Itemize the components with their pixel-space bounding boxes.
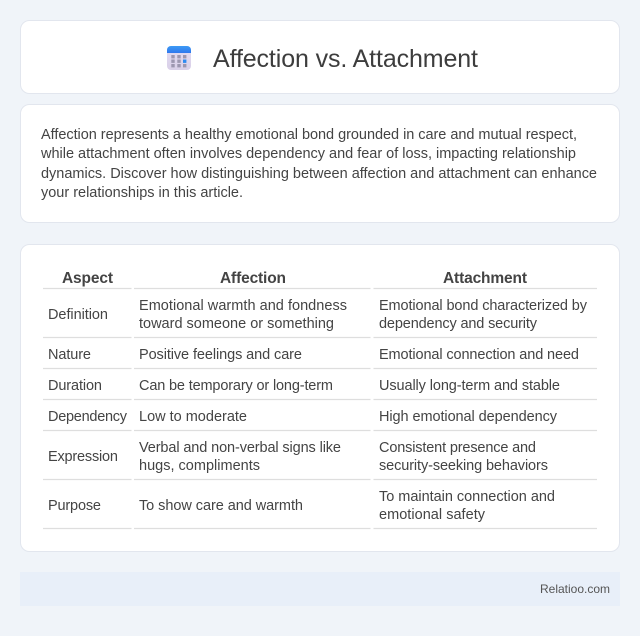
row: Definition: toward someone or something (139, 316, 334, 332)
table rules (43, 288, 597, 528)
icon: calendar (167, 46, 191, 70)
row: Purpose (48, 489, 555, 523)
intro text: dynamics. Discover how distinguishing between affection and attachment can enhance (41, 166, 597, 182)
row: Expression: hugs, compliments (139, 458, 260, 474)
row: Definition: dependency and security (379, 316, 538, 332)
intro text: while attachment often involves dependency and fear of loss, impacting relationship (40, 146, 576, 162)
row: Duration (48, 378, 560, 394)
row: Nature: Nature (48, 347, 91, 363)
row: Duration: Duration (48, 378, 102, 394)
panel: comparison table (20, 244, 620, 552)
row: Expression: Verbal and non-verbal signs like (139, 440, 341, 456)
row: Dependency (48, 409, 558, 425)
intro text: your relationships in this article. (41, 185, 243, 201)
row: Dependency: Dependency (48, 409, 128, 425)
row: Expression: security-seeking behaviors (379, 458, 548, 474)
row: Definition: Definition (48, 307, 108, 323)
panel: title header (20, 20, 620, 94)
title: Affection vs. Attachment (213, 45, 478, 73)
row: Duration: Usually long-term and stable (379, 378, 560, 394)
footer bar (20, 572, 620, 606)
row: Expression: Expression (48, 449, 118, 465)
table header (62, 270, 527, 287)
table header: Aspect (62, 270, 113, 287)
row: Purpose: emotional safety (379, 507, 486, 523)
row: Expression (48, 440, 548, 474)
row: Purpose: To maintain connection and (379, 489, 555, 505)
row: Dependency: High emotional dependency (379, 409, 558, 425)
table header: Attachment (443, 270, 527, 287)
intro text: Affection represents a healthy emotional bond grounded in care and mutual respect, (41, 127, 577, 143)
footer credit: Relatioo.com (540, 582, 610, 596)
row: Definition: Emotional bond characterized by (379, 298, 588, 314)
row: Nature: Emotional connection and need (379, 347, 579, 363)
panel: introduction (20, 104, 620, 222)
intro text (40, 127, 597, 201)
table header: Affection (220, 270, 286, 287)
row: Definition (48, 298, 588, 332)
row: Nature (48, 347, 579, 363)
row: Purpose: Purpose (48, 498, 101, 514)
row: Duration: Can be temporary or long-term (139, 378, 333, 394)
row: Nature: Positive feelings and care (139, 347, 302, 363)
row: Purpose: To show care and warmth (139, 498, 303, 514)
row: Expression: Consistent presence and (379, 440, 536, 456)
row: Definition: Emotional warmth and fondness (139, 298, 347, 314)
row: Dependency: Low to moderate (139, 409, 247, 425)
